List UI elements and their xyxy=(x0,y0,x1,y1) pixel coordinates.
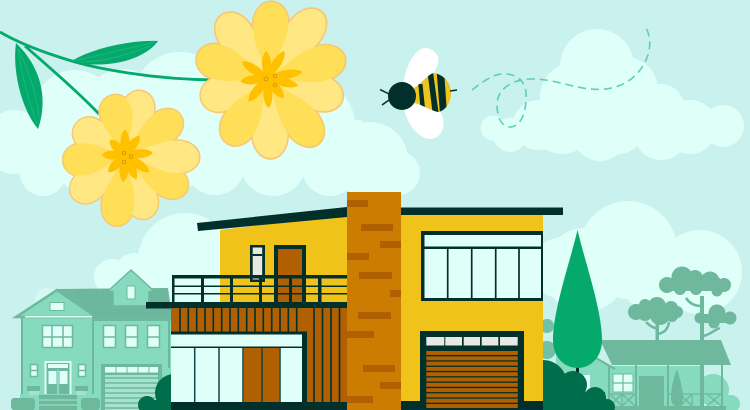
faded tree: small pine xyxy=(628,297,683,342)
leaf: upper xyxy=(70,41,158,65)
stamens xyxy=(102,130,153,182)
gable xyxy=(16,290,96,318)
gable slope xyxy=(596,358,615,369)
lower windows xyxy=(30,364,86,376)
flat roof xyxy=(401,208,563,215)
stripes xyxy=(418,73,446,112)
corner columns xyxy=(21,318,170,398)
planters xyxy=(27,386,88,395)
bush: dark green right xyxy=(519,360,615,410)
side window xyxy=(583,375,590,391)
dormer xyxy=(108,270,154,306)
large upper window xyxy=(421,231,543,301)
porch base xyxy=(606,406,726,410)
wood cladding xyxy=(171,308,347,402)
shrubs xyxy=(11,398,100,410)
front door xyxy=(44,361,72,395)
cloud: behind left of house xyxy=(35,213,238,410)
flower: upper centre xyxy=(192,1,349,159)
stamens xyxy=(239,49,303,108)
faded house: right xyxy=(556,340,731,410)
leaf: lower xyxy=(15,43,43,129)
wings xyxy=(403,48,444,139)
flower: lower left xyxy=(62,87,200,228)
roof texture xyxy=(70,288,172,316)
window xyxy=(613,374,633,392)
upper windows xyxy=(42,325,160,348)
bee xyxy=(380,48,457,139)
roof xyxy=(600,340,731,365)
petal fills xyxy=(62,87,200,228)
body xyxy=(556,352,704,410)
railings xyxy=(610,394,721,406)
branch with leaves xyxy=(0,32,220,129)
house body xyxy=(22,318,172,410)
porch posts xyxy=(608,365,723,407)
stems xyxy=(0,32,220,114)
petals xyxy=(62,87,200,228)
upper yellow wall xyxy=(220,215,347,305)
eave xyxy=(93,316,172,321)
steps xyxy=(20,394,100,410)
brick chimney xyxy=(347,192,401,410)
petals xyxy=(192,1,349,159)
faded tree: tall pine xyxy=(659,266,736,342)
right base xyxy=(401,401,543,410)
petal fills xyxy=(192,1,349,159)
cloud: upper right xyxy=(480,29,744,161)
faded background shrubs: right of house xyxy=(538,319,740,410)
garage xyxy=(101,364,162,410)
tall cypress tree xyxy=(553,230,602,380)
door xyxy=(639,376,664,407)
balcony slab xyxy=(146,302,347,308)
body xyxy=(414,73,451,112)
base xyxy=(171,402,347,410)
garage xyxy=(420,331,524,410)
main roof xyxy=(57,288,172,316)
petal outlines xyxy=(62,87,200,228)
small window xyxy=(250,245,265,282)
right yellow wall xyxy=(401,215,543,402)
sloped roof xyxy=(197,207,347,231)
head xyxy=(388,82,416,110)
bush: dark green left xyxy=(138,374,193,410)
main house xyxy=(146,192,563,410)
faded house: left xyxy=(11,270,172,410)
cloud: upper left xyxy=(0,50,420,199)
bee flight trail xyxy=(472,28,650,127)
beam and post xyxy=(171,332,307,402)
petal outlines xyxy=(192,1,349,159)
balcony railing xyxy=(172,275,347,303)
balcony door xyxy=(274,245,306,303)
cloud: behind right of house xyxy=(530,201,742,315)
antennae and sting xyxy=(380,90,457,105)
garage lights xyxy=(426,337,518,346)
garage door slats xyxy=(426,351,518,408)
lower glazing xyxy=(171,334,302,402)
porch cypress xyxy=(671,369,683,406)
